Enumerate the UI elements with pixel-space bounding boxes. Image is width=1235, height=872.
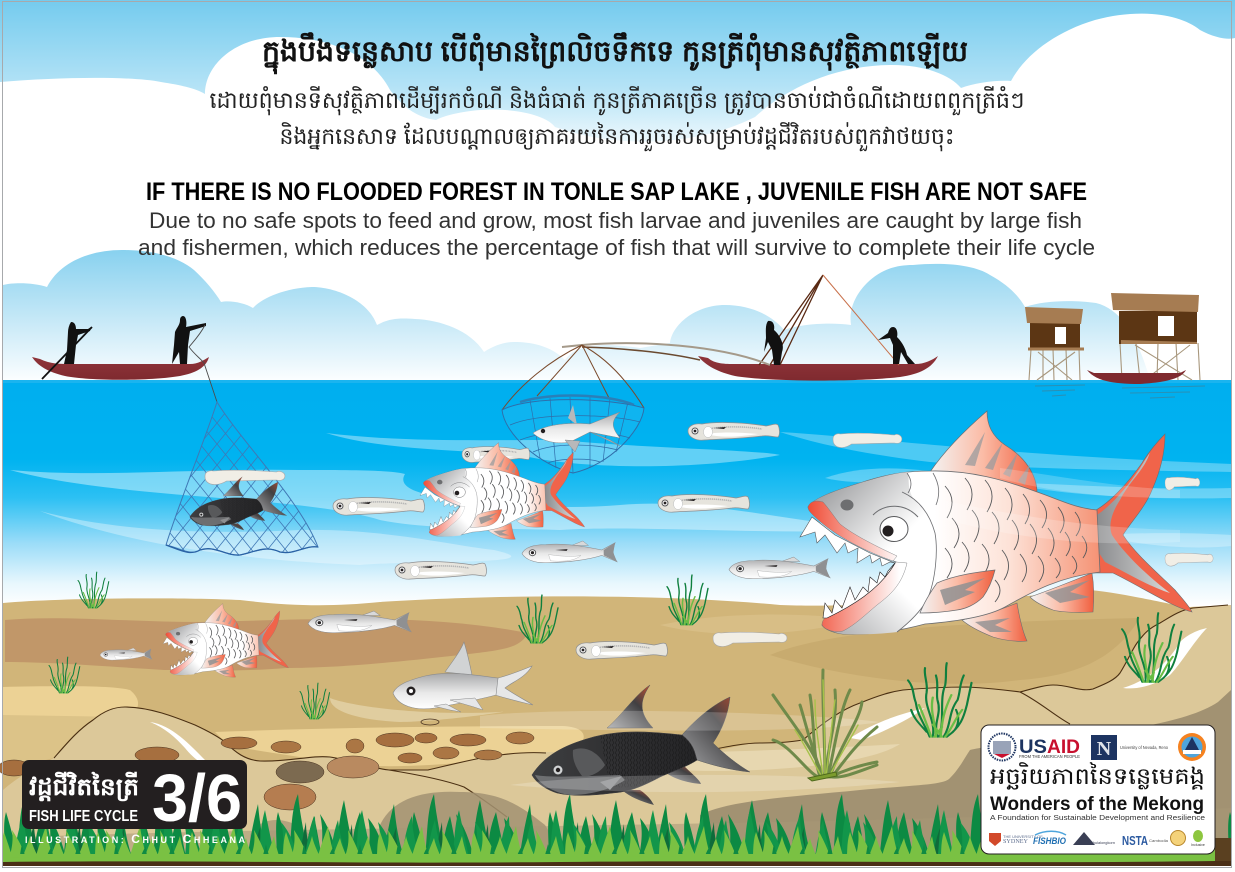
boat: lift-net fishermen: [562, 275, 938, 381]
partner logos: Inclusive: [1191, 843, 1205, 847]
partner logos: [989, 830, 1205, 848]
aquatic grass tufts: [49, 572, 1181, 737]
badge: fish life cycle 3/6: FISH LIFE CYCLE: [29, 808, 138, 825]
large aquatic plant: [773, 670, 877, 781]
English project name: Wonders of the Mekong: [990, 794, 1204, 815]
larva in net: [205, 470, 285, 485]
tagline: A Foundation for Sustainable Development and Resilience: [990, 813, 1205, 822]
larvae and juvenile fish: [100, 423, 1213, 660]
English description: and fishermen, which reduces the percentage of fish that will survive to complete their life cycle: [138, 235, 1095, 260]
water light bands over fish: [940, 468, 1180, 543]
partner logos: SYDNEY: [1003, 839, 1029, 845]
Khmer project name: អច្ឆរិយភាពនៃទន្លេមេគង្គ: [990, 762, 1205, 790]
partner logos: NSTA: [1122, 833, 1148, 848]
badge: fish life cycle 3/6: វដ្តជីវិតនៃត្រី: [29, 771, 139, 802]
partner logos: Chulalongkorn: [1090, 840, 1115, 845]
background sky and clouds: [0, 0, 1235, 400]
lift net with silver fish: [502, 345, 644, 473]
USAID logo: AID: [1047, 737, 1080, 758]
University of Nevada logo: N: [1097, 738, 1112, 760]
horizon clouds: [3, 250, 1150, 380]
dark fish caught in net: [190, 477, 287, 530]
large silver fish: [393, 642, 533, 712]
partner logos: FISHBIO: [1033, 836, 1066, 846]
silver fish in lift net: [533, 405, 620, 452]
medium fish chasing juveniles: [420, 443, 585, 539]
water: [3, 380, 1232, 610]
cast net with dark fish: [166, 402, 318, 555]
light bands across dark fish: [480, 711, 900, 792]
USAID logo: US: [1019, 737, 1047, 758]
round Cambodian agency seal: [1178, 733, 1206, 761]
badge: fish life cycle 3/6: 3/6: [152, 761, 242, 836]
University of Nevada logo: University of Nevada, Reno: [1120, 745, 1168, 751]
logo panel: [981, 725, 1215, 854]
lake bed sand: [3, 590, 1231, 866]
boat: left cast-net fishermen: [32, 316, 217, 402]
big piranha-like fish: [800, 411, 1192, 641]
University of Nevada logo: [1091, 735, 1168, 760]
illustration credit: ILLUSTRATION: C HHUT C HHEANA: [25, 832, 245, 846]
badge: fish life cycle 3/6: [22, 760, 247, 836]
USAID logo: FROM THE AMERICAN PEOPLE: [1019, 754, 1080, 759]
dark fish on the lake bed: [532, 685, 750, 805]
shoreline grass: [3, 792, 1231, 866]
English description: [138, 208, 1095, 260]
Khmer description: [210, 86, 1024, 152]
stilt houses and small boat: [1025, 293, 1205, 398]
title: Khmer heading: ក្នុងបឹងទន្លេសាប បើពុំមានព្រៃលិចទឹកទេ កូនត្រីពុំមានសុវត្ថិភាពឡើយ: [262, 32, 968, 75]
English heading: IF THERE IS NO FLOODED FOREST IN TONLE SAP LAKE , JUVENILE FISH ARE NOT SAFE: [146, 178, 1087, 206]
USAID logo: [988, 734, 1080, 760]
English description: Due to no safe spots to feed and grow, most fish larvae and juveniles are caught by large fish: [149, 208, 1082, 233]
partner logos: THE UNIVERSITY OF: [1003, 834, 1043, 839]
partner logos: Cambodia: [1149, 839, 1168, 843]
Khmer description: ដោយពុំមានទីសុវត្ថិភាពដើម្បីរកចំណី និងធំធាត់ កូនត្រីភាគច្រើន ត្រូវបានចាប់ជាចំណីដោយពពួកត្រីធំៗ: [210, 86, 1024, 116]
pebbles: [0, 719, 534, 810]
small fish on lake bed: [163, 604, 288, 677]
Khmer description: និងអ្នកនេសាទ ដែលបណ្តាលឲ្យភាគរយនៃការរួចរស់សម្រាប់វដ្តជីវិតរបស់ពួកវាថយចុះ: [280, 122, 954, 152]
